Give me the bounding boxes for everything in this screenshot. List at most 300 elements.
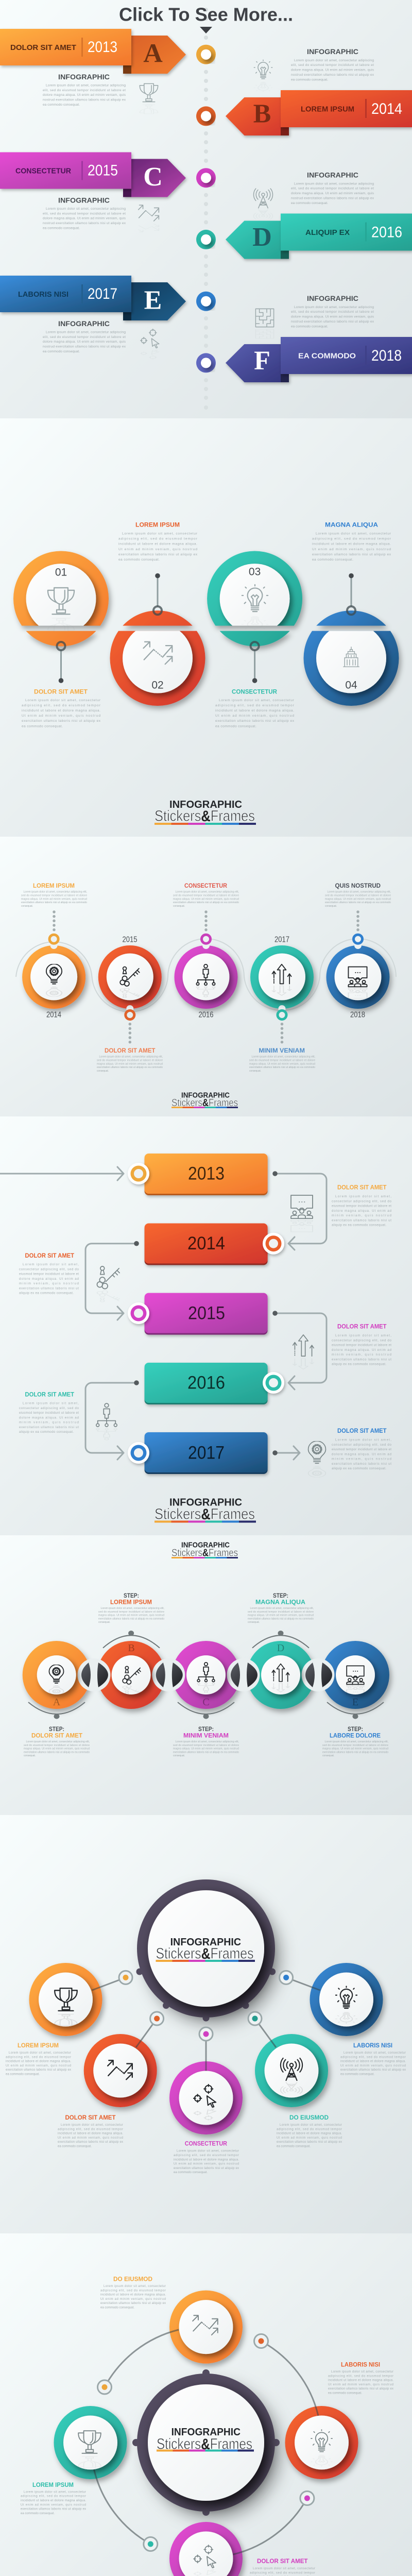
heading: DOLOR SIT AMET <box>65 2114 116 2121</box>
title: Click To See More... <box>119 4 293 25</box>
text block: exercitation ullamco laboris nisi ut aliquip ex <box>277 2141 342 2144</box>
text block: consectetur adipiscing elit, sed do <box>332 1338 392 1342</box>
text block: Ut enim ad minim veniam, quis nostrud <box>21 2503 86 2506</box>
text block: magna aliqua. Ut enim ad minim veniam, quis nostrud <box>249 1062 315 1065</box>
text block: ea commodo consequat. <box>58 2145 92 2148</box>
text block: Ut enim ad minim veniam, quis nostrud <box>215 714 294 718</box>
panel 1: letter timeline <box>0 0 412 418</box>
text block: exercitation ullamco laboris nisi ut <box>332 1218 391 1222</box>
letters: D <box>277 1642 284 1654</box>
panel 7: hub with four nodes <box>0 2233 412 2576</box>
text block <box>100 2285 166 2309</box>
text block: adipiscing elit, sed do eiusmod tempor <box>58 2128 123 2131</box>
text block: Lorem ipsum dolor sit amet, consectetur <box>177 2150 239 2153</box>
text block: ea commodo consequat. <box>21 2512 55 2515</box>
heading: INFOGRAPHIC <box>307 294 358 302</box>
connector 03 <box>251 642 259 683</box>
bar 2016: 2016 <box>187 1372 225 1393</box>
panel 5: step chain <box>0 1535 412 1815</box>
text block: minim veniam, quis nostrud <box>332 1214 392 1217</box>
year: 2015 <box>88 162 118 179</box>
text block: eiusmod tempor incididunt ut labore et <box>19 1411 79 1415</box>
text block: magna aliqua. Ut enim ad minim veniam, quis nostrud <box>173 1748 239 1751</box>
text block: nostrud exercitation ullamco laboris nisi ut aliquip ex <box>43 98 126 102</box>
icon: bulb <box>254 60 272 92</box>
text block: sed do eiusmod tempor incididunt ut labore et dolore <box>173 894 239 897</box>
text block: Ut enim ad minim veniam, quis nostrud <box>118 548 197 551</box>
years: 2015 <box>123 936 138 944</box>
text block: exercitation ullamco laboris nisi ut aliquip ex ea commodo <box>24 1751 90 1754</box>
circle 03 <box>207 551 302 646</box>
node <box>196 106 216 126</box>
icon: down triangle <box>200 27 212 33</box>
year: 2013 <box>88 39 117 56</box>
text block <box>22 699 101 728</box>
connector: 2016 to 2017 <box>85 1380 139 1460</box>
text block <box>98 1607 164 1624</box>
heading: MINIM VENIAM <box>259 1047 305 1054</box>
text block: consectetur adipiscing elit, sed do <box>332 1443 392 1447</box>
text block: adipiscing elit, sed do eiusmod tempor <box>312 537 391 541</box>
text block <box>312 532 391 562</box>
text block: Lorem ipsum dolor sit amet, consectetur adipiscing elit, <box>328 891 391 894</box>
icon: up arrows <box>293 1335 314 1369</box>
text block: sed do eiusmod tempor incididunt ut labore et dolore <box>322 1744 388 1747</box>
step E heading: LABORE DOLORE <box>330 1732 381 1739</box>
text block <box>173 891 239 908</box>
text block <box>332 1195 392 1227</box>
text block: magna aliqua. Ut enim ad minim veniam, quis nostrud <box>325 897 391 901</box>
text block: exercitation ullamco laboris nisi ut aliquip ex ea commodo <box>249 1066 315 1069</box>
step B heading <box>110 1592 152 1605</box>
text block: ea commodo consequat. <box>215 724 256 728</box>
heading: CONSECTETUR <box>184 882 227 889</box>
ribbon 2015 <box>0 152 131 189</box>
text block: ea commodo consequat. <box>100 2306 134 2309</box>
years: 2014 <box>46 1011 61 1019</box>
row E <box>0 276 216 359</box>
text block: elit, sed do eiusmod tempor incididunt ut labore et <box>43 89 126 92</box>
text block: Lorem ipsum dolor sit amet, <box>23 1401 79 1405</box>
text block: exercitation ullamco laboris nisi ut aliquip ex ea commodo <box>248 1617 314 1620</box>
heading: MAGNA ALIQUA <box>325 521 378 529</box>
node: arrows <box>93 2043 147 2098</box>
text block: adipiscing elit, sed do eiusmod tempor <box>277 2128 342 2131</box>
logo <box>157 2427 254 2452</box>
text block: Lorem ipsum dolor sit amet, consectetur <box>104 2285 166 2288</box>
text block: consequat. <box>173 905 185 908</box>
text block: exercitation ullamco laboris nisi ut aliquip ex <box>118 553 198 556</box>
text block <box>325 891 391 908</box>
heading: DOLOR SIT AMET <box>34 688 88 696</box>
node: targets <box>179 2071 233 2125</box>
icon: tower <box>253 189 273 219</box>
years: 2018 <box>350 1011 365 1019</box>
text block: nostrud exercitation ullamco laboris nisi ut aliquip ex <box>43 345 126 348</box>
arrow tag B <box>226 97 289 135</box>
heading: DOLOR SIT AMET <box>337 1427 387 1434</box>
logo <box>171 1091 238 1109</box>
connector: exit arrow <box>272 1446 300 1460</box>
text block: sed do eiusmod tempor incididunt ut labore et dolore <box>248 1611 314 1614</box>
heading: DOLOR SIT AMET <box>25 1391 75 1398</box>
text block: aliquip ex ea commodo consequat. <box>19 1430 74 1434</box>
text block: Lorem ipsum dolor sit amet, consectetur <box>25 699 101 702</box>
text block: Lorem ipsum dolor sit amet, consectetur adipiscing elit, <box>250 1607 314 1610</box>
circle 03: 03 <box>249 566 261 578</box>
step C heading: MINIM VENIAM <box>183 1732 229 1739</box>
text block <box>328 2370 393 2395</box>
step E heading <box>330 1725 381 1739</box>
text block: adipiscing elit, sed do eiusmod tempor <box>328 2375 393 2378</box>
arrow tag F <box>226 344 289 382</box>
text block: nostrud exercitation ullamco laboris nisi ut aliquip ex <box>291 320 374 324</box>
text block: sed do eiusmod tempor incididunt ut labore et dolore <box>21 894 87 897</box>
ribbon 2017 <box>0 276 131 312</box>
text block: incididunt ut labore et dolore magna aliqua. <box>277 2132 342 2136</box>
text block: sed do eiusmod tempor incididunt ut labore et dolore <box>249 1059 315 1062</box>
text block: incididunt ut labore et dolore magna aliqua. <box>6 2060 71 2063</box>
circle 02 <box>110 611 205 706</box>
bar 2017: 2017 <box>188 1443 225 1463</box>
text block: adipiscing elit, sed do eiusmod tempor <box>340 2056 406 2059</box>
text block: exercitation ullamco laboris nisi ut <box>19 1286 79 1290</box>
text block: Lorem ipsum dolor sit amet, consectetur adipiscing <box>46 207 126 211</box>
text block: adipiscing elit, sed do eiusmod tempor <box>215 704 295 707</box>
text block: magna aliqua. Ut enim ad minim veniam, quis nostrud <box>248 1614 314 1617</box>
text block: consequat. <box>24 1754 36 1757</box>
node <box>196 45 216 64</box>
node 2016 <box>174 935 238 1009</box>
text block: consectetur adipiscing elit, sed do <box>19 1267 79 1271</box>
node <box>196 292 216 311</box>
node: bulb <box>295 2415 349 2470</box>
text block: exercitation ullamco laboris nisi ut aliquip ex <box>215 719 295 723</box>
node 2017 <box>250 945 314 1019</box>
year: 2016 <box>371 224 402 241</box>
heading: DOLOR SIT AMET <box>337 1323 387 1330</box>
label: LOREM IPSUM <box>301 105 354 113</box>
bar 2015: 2015 <box>188 1303 225 1323</box>
text block: aliquip ex ea commodo consequat. <box>19 1291 74 1295</box>
text block: incididunt ut labore et dolore magna aliqua. <box>328 2379 393 2382</box>
heading: DOLOR SIT AMET <box>337 1184 387 1191</box>
text block: dolore magna aliqua. Ut enim ad minim veniam, quis <box>43 340 126 344</box>
step E centre <box>336 1655 375 1694</box>
step B centre <box>112 1655 151 1694</box>
text block: exercitation ullamco laboris nisi ut aliquip ex ea commodo <box>173 1751 239 1754</box>
icon: targets <box>141 329 159 359</box>
text block <box>6 2052 71 2076</box>
heading: DO EIUSMOD <box>289 2114 329 2121</box>
connector: 2014 to 2015 <box>85 1241 139 1320</box>
node <box>196 168 216 188</box>
text block <box>43 83 126 107</box>
text block: Ut enim ad minim veniam, quis nostrud <box>328 2383 393 2386</box>
circle 04 <box>304 611 399 706</box>
badge 2014 <box>263 1233 284 1255</box>
bar 2016 <box>145 1363 268 1404</box>
text block: magna aliqua. Ut enim ad minim veniam, quis nostrud <box>97 1062 163 1065</box>
text block: magna aliqua. Ut enim ad minim veniam, quis nostrud <box>322 1748 388 1751</box>
text block: minim veniam, quis nostrud <box>332 1353 392 1357</box>
icon: arrows <box>139 205 159 232</box>
text block <box>332 1334 392 1366</box>
icon: gear bulb <box>308 1441 325 1478</box>
text block: ea commodo consequat. <box>312 558 353 562</box>
text block <box>19 1401 79 1434</box>
text block: exercitation ullamco laboris nisi ut aliquip ex <box>22 719 101 723</box>
heading: LOREM IPSUM <box>32 2481 74 2488</box>
text block: Lorem ipsum dolor sit amet, consectetur adipiscing <box>294 306 374 309</box>
text block: ea commodo consequat. <box>43 227 80 230</box>
text block: magna aliqua. Ut enim ad minim veniam, quis nostrud <box>98 1614 164 1617</box>
row F <box>196 294 412 382</box>
text block: Ut enim ad minim veniam, quis nostrud <box>340 2064 406 2067</box>
text block: adipiscing elit, sed do eiusmod tempor <box>118 537 198 541</box>
step B heading: STEP: <box>124 1592 139 1599</box>
text block: exercitation ullamco laboris nisi ut aliquip ex <box>58 2141 123 2144</box>
text block: sed do eiusmod tempor incididunt ut labore et dolore <box>173 1744 239 1747</box>
text block: incididunt ut labore et dolore magna aliqua. <box>21 2499 86 2502</box>
text block <box>97 1056 163 1073</box>
text block: incididunt ut labore et dolore magna aliqua. <box>312 543 391 546</box>
marker dots <box>123 1975 289 2037</box>
node rings <box>54 2291 358 2576</box>
node: trophy <box>63 2415 117 2470</box>
logo <box>171 1540 238 1559</box>
link C-D <box>227 1658 260 1691</box>
node: trophy <box>39 1972 93 2027</box>
text block: Lorem ipsum dolor sit amet, consectetur adipiscing elit, <box>24 891 87 894</box>
heading: INFOGRAPHIC <box>307 171 358 179</box>
logo: Stickers&Frames <box>154 1505 255 1523</box>
arrow tag C <box>123 159 186 197</box>
icon: key <box>97 1266 119 1302</box>
arrow tag A <box>123 36 186 74</box>
text block: exercitation ullamco laboris nisi ut aliquip ex ea commodo <box>322 1751 388 1754</box>
ribbon 2016 <box>281 213 412 250</box>
text block: magna aliqua. Ut enim ad minim veniam, quis nostrud <box>24 1748 90 1751</box>
step E heading: STEP: <box>348 1725 363 1733</box>
row D <box>196 171 412 259</box>
row B <box>196 47 412 135</box>
text block: eiusmod tempor incididunt ut labore et <box>332 1448 391 1451</box>
text block: Lorem ipsum dolor sit amet, consectetur adipiscing elit, <box>101 1607 164 1610</box>
text block: ea commodo consequat. <box>43 350 80 353</box>
heading: DOLOR SIT AMET <box>257 2557 308 2565</box>
text block <box>43 331 126 353</box>
year: 2018 <box>371 347 402 364</box>
icon: org <box>96 1403 117 1440</box>
node 2018 <box>327 935 389 1009</box>
text block: exercitation ullamco laboris nisi ut aliquip ex <box>328 2387 393 2391</box>
heading: QUIS NOSTRUD <box>335 882 381 889</box>
circle 02: 02 <box>151 679 164 691</box>
text block: exercitation ullamco laboris nisi ut aliquip ex ea commodo <box>325 901 391 904</box>
text block: consequat. <box>173 1754 185 1757</box>
heading: LABORIS NISI <box>341 2361 380 2368</box>
heading: INFOGRAPHIC <box>58 196 110 204</box>
text block: consectetur adipiscing elit, sed do <box>332 1199 392 1203</box>
text block: adipiscing elit, sed do eiusmod tempor <box>6 2056 71 2059</box>
node: bulb <box>319 1972 373 2027</box>
letter: A <box>143 39 163 68</box>
text block <box>174 2150 239 2174</box>
text block: dolore magna aliqua. Ut enim ad minim veniam, quis <box>291 315 374 319</box>
text block: eiusmod tempor incididunt ut labore et <box>332 1205 391 1208</box>
letter: F <box>254 346 270 375</box>
logo: INFOGRAPHIC <box>169 799 242 810</box>
text block: consectetur adipiscing elit, sed do <box>19 1406 79 1410</box>
icon: chat <box>291 1195 313 1232</box>
text block: Lorem ipsum dolor sit amet, consectetur <box>122 532 198 536</box>
text block: Lorem ipsum dolor sit amet, consectetur adipiscing elit, <box>175 891 239 894</box>
ring markers <box>98 2334 314 2551</box>
text block <box>277 2124 342 2148</box>
text block: eiusmod tempor incididunt ut labore et <box>332 1344 391 1347</box>
years: 2017 <box>274 936 289 944</box>
circle 01 <box>13 551 109 646</box>
text block: Lorem ipsum dolor sit amet, consectetur adipiscing <box>46 331 126 334</box>
text block: consequat. <box>322 1754 334 1757</box>
text block: Lorem ipsum dolor sit amet, consectetur <box>9 2052 71 2055</box>
node: tower <box>265 2043 318 2098</box>
connector: 2015 to 2016 <box>272 1311 327 1389</box>
letters: E <box>352 1697 358 1708</box>
text block <box>340 2052 406 2076</box>
ribbon 2013 <box>0 29 131 65</box>
text block <box>250 2567 315 2576</box>
logo: INFOGRAPHIC <box>171 2427 241 2438</box>
badge 2017 <box>128 1442 149 1464</box>
bar 2013 <box>145 1154 268 1195</box>
letters: B <box>128 1642 135 1654</box>
arrow tag D <box>226 221 289 259</box>
ribbon 2018 <box>281 337 412 374</box>
logo: Stickers&Frames <box>157 2436 252 2452</box>
text block <box>21 2490 86 2515</box>
text block: incididunt ut labore et dolore magna aliqua. <box>22 709 100 713</box>
connector 04 <box>347 573 355 615</box>
text block: dolore magna aliqua. Ut enim ad <box>19 1416 79 1419</box>
text block: magna aliqua. Ut enim ad minim veniam, quis nostrud <box>173 897 239 901</box>
text block: incididunt ut labore et dolore magna aliqua. <box>118 543 197 546</box>
icon: trophy <box>140 83 158 114</box>
node 2014 <box>22 935 85 1009</box>
text block: elit, sed do eiusmod tempor incididunt ut labore et <box>43 212 126 215</box>
circle 04: 04 <box>345 679 357 691</box>
text block: consequat. <box>98 1621 110 1624</box>
text block: Lorem ipsum dolor sit amet, <box>23 1263 79 1266</box>
logo: Stickers&Frames <box>154 808 255 824</box>
heading: DOLOR SIT AMET <box>105 1047 156 1054</box>
text block: Lorem ipsum dolor sit amet, <box>335 1195 391 1198</box>
text block: Ut enim ad minim veniam, quis nostrud <box>58 2137 123 2140</box>
bar 2014 <box>145 1223 268 1265</box>
node rings <box>29 1963 383 2134</box>
text block: Lorem ipsum dolor sit amet, consectetur adipiscing elit, <box>99 1056 163 1059</box>
text block: Lorem ipsum dolor sit amet, consectetur adipiscing elit, <box>26 1740 90 1743</box>
text block: adipiscing elit, sed do eiusmod tempor <box>250 2571 315 2574</box>
letter: C <box>143 162 163 192</box>
text block: dolore magna aliqua. Ut enim ad <box>332 1209 392 1213</box>
text block: Lorem ipsum dolor sit amet, consectetur adipiscing elit, <box>251 1056 315 1059</box>
text block: ea commodo consequat. <box>43 103 80 107</box>
bar 2015 <box>145 1293 268 1335</box>
text block: Lorem ipsum dolor sit amet, consectetur <box>316 532 391 536</box>
text block: nostrud exercitation ullamco laboris nisi ut aliquip ex <box>291 73 374 77</box>
text block: ea commodo consequat. <box>118 558 160 562</box>
node 2015 <box>98 945 162 1019</box>
timeline dots <box>204 10 208 408</box>
text block: ea commodo consequat. <box>6 2073 40 2076</box>
text block <box>291 182 374 205</box>
text block: exercitation ullamco laboris nisi ut aliquip ex <box>100 2302 166 2305</box>
text block: incididunt ut labore et dolore magna aliqua. <box>100 2294 166 2297</box>
text block: adipiscing elit, sed do eiusmod tempor <box>21 2495 86 2498</box>
text block: incididunt ut labore et dolore magna aliqua. <box>58 2132 123 2136</box>
text block: elit, sed do eiusmod tempor incididunt ut labore et <box>43 335 126 339</box>
text block: exercitation ullamco laboris nisi ut aliquip ex <box>340 2069 406 2072</box>
step A heading: STEP: <box>49 1725 64 1733</box>
text block: Lorem ipsum dolor sit amet, <box>335 1334 391 1337</box>
text block: sed do eiusmod tempor incididunt ut labore et dolore <box>98 1611 164 1614</box>
circle 01: 01 <box>55 567 67 578</box>
text block: Lorem ipsum dolor sit amet, consectetur <box>331 2370 393 2374</box>
letter: B <box>253 99 271 129</box>
text block: Lorem ipsum dolor sit amet, consectetur <box>280 2124 342 2127</box>
text block: aliquip ex ea commodo consequat. <box>332 1363 386 1366</box>
label: LABORIS NISI <box>18 290 68 299</box>
text block <box>43 207 126 230</box>
text block: incididunt ut labore et dolore magna aliqua. <box>174 2158 239 2161</box>
text block: ea commodo consequat. <box>174 2171 208 2174</box>
text block: magna aliqua. Ut enim ad minim veniam, quis nostrud <box>21 897 87 901</box>
connectors <box>92 1977 320 2071</box>
orbit line <box>16 939 396 1012</box>
text block: sed do eiusmod tempor incididunt ut labore et dolore <box>325 894 391 897</box>
text block: exercitation ullamco laboris nisi ut aliquip ex ea commodo <box>173 901 239 904</box>
connector 01 <box>57 642 65 683</box>
text block: nostrud exercitation ullamco laboris nisi ut aliquip ex <box>291 196 374 200</box>
text block <box>249 1056 315 1073</box>
text block: Lorem ipsum dolor sit amet, consectetur adipiscing elit, <box>175 1740 239 1743</box>
node <box>196 230 216 249</box>
text block: adipiscing elit, sed do eiusmod tempor <box>22 704 101 707</box>
link B-C <box>152 1658 185 1691</box>
text block: consequat. <box>248 1621 260 1624</box>
letters: C <box>202 1697 210 1708</box>
text block: sed do eiusmod tempor incididunt ut labore et dolore <box>97 1059 163 1062</box>
text block: exercitation ullamco laboris nisi ut aliquip ex ea commodo <box>97 1066 163 1069</box>
text block: aliquip ex ea commodo consequat. <box>332 1224 386 1227</box>
text block <box>322 1740 388 1757</box>
text block: ea commodo consequat. <box>277 2145 311 2148</box>
text block: elit, sed do eiusmod tempor incididunt ut labore et <box>291 63 374 67</box>
connector: entry arrow <box>0 1167 124 1180</box>
text block: adipiscing elit, sed do eiusmod tempor <box>100 2289 166 2292</box>
logo: Stickers&Frames <box>171 1097 238 1109</box>
heading: INFOGRAPHIC <box>307 47 358 56</box>
logo: INFOGRAPHIC <box>181 1091 230 1099</box>
logo <box>154 799 256 825</box>
node: arrows <box>179 2300 233 2354</box>
node: targets <box>179 2532 233 2576</box>
connector 02 <box>153 573 162 615</box>
letters <box>53 1642 358 1708</box>
step D heading: STEP: <box>273 1592 288 1599</box>
